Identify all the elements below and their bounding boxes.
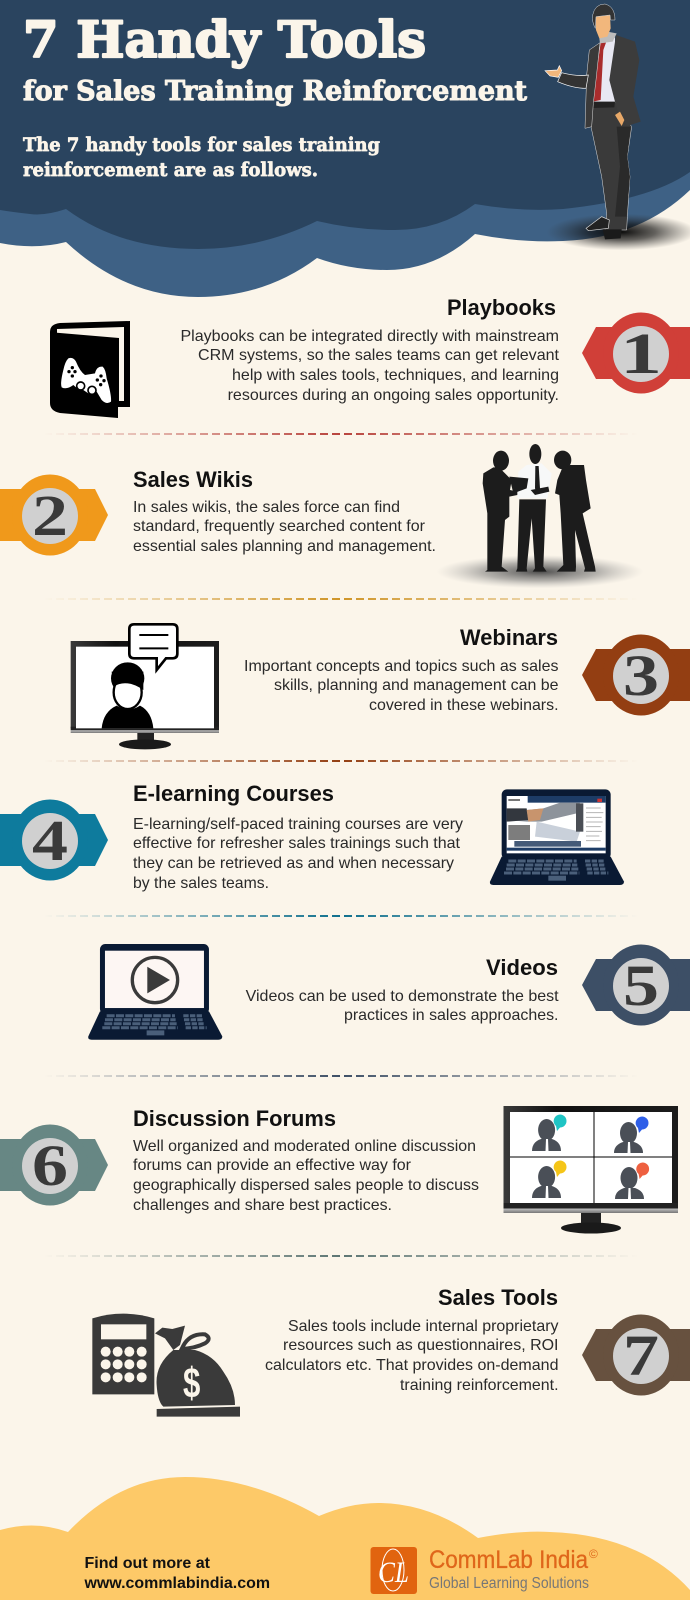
text block: standard, frequently searched content for: [133, 518, 426, 535]
text block: covered in these webinars.: [369, 697, 558, 714]
logo: CommLab India: [370, 1546, 598, 1594]
text block: practices in sales approaches.: [344, 1007, 558, 1024]
person 4 with red bubble: [615, 1162, 649, 1199]
panel: footer: [0, 1477, 690, 1600]
intro text: The 7 handy tools for sales training: [23, 134, 380, 156]
panel: 5 Videos: [88, 944, 690, 1040]
icon: webinar monitor: [71, 624, 219, 749]
text block: forums can provide an effective way for: [133, 1157, 412, 1174]
text block: resources during an ongoing sales opportunity.: [228, 387, 559, 404]
badge: number 1: [582, 312, 690, 394]
panel: 4 E-learning Courses: [0, 781, 624, 892]
text block: they can be retrieved as and when necessary: [133, 855, 454, 872]
subtitle: for Sales Training Reinforcement: [23, 76, 528, 107]
heading: Sales Tools: [438, 1285, 558, 1310]
text block: [265, 1318, 558, 1394]
footer wave: [0, 1477, 690, 1600]
badge: number 4: 4: [32, 808, 68, 873]
logo: CommLab India: ©: [589, 1547, 598, 1561]
panel: header: [0, 0, 690, 297]
heading: Sales Wikis: [133, 467, 253, 492]
text block: [246, 988, 559, 1024]
text block: [133, 1138, 479, 1214]
badge: number 1: 1: [620, 321, 662, 386]
text block: help with sales tools, techniques, and learning: [232, 367, 559, 384]
icon: laptop with play button: [88, 944, 222, 1040]
panel: 1 Playbooks: [50, 295, 690, 418]
text block: Playbooks can be integrated directly with mainstream: [180, 328, 559, 345]
icon: game playbook: [50, 321, 130, 418]
badge: number 4: [0, 800, 108, 880]
text block: geographically dispersed sales people to discuss: [133, 1177, 479, 1194]
badge: number 5: 5: [623, 953, 659, 1018]
logo: CommLab India: CommLab India: [429, 1546, 588, 1574]
badge: number 6: 6: [32, 1133, 68, 1198]
person 1 with teal bubble: [532, 1114, 566, 1151]
title: 7 Handy Tools: [23, 10, 426, 69]
heading: Discussion Forums: [133, 1106, 336, 1131]
person 3 with yellow bubble: [532, 1160, 566, 1198]
text block: Sales tools include internal proprietary: [288, 1318, 558, 1335]
intro text: [23, 134, 380, 181]
panel: 2 Sales Wikis: [0, 444, 643, 588]
text block: essential sales planning and management.: [133, 538, 436, 555]
badge: number 3: 3: [623, 643, 659, 708]
person 2 with blue bubble: [614, 1116, 648, 1153]
text block: Important concepts and topics such as sales: [244, 658, 558, 675]
logo: CommLab India: Global Learning Solutions: [429, 1575, 589, 1592]
heading: E-learning Courses: [133, 781, 334, 806]
icon: laptop with course: [490, 789, 624, 885]
illustration: businessman presenting: [545, 4, 690, 250]
icon: calculator and money bag: [92, 1314, 240, 1417]
call to action: [84, 1555, 270, 1592]
call to action: www.commlabindia.com: [84, 1575, 270, 1592]
logo: CommLab India: CL: [378, 1556, 409, 1589]
icon: calculator and money bag: $: [183, 1359, 200, 1406]
text block: challenges and share best practices.: [133, 1197, 392, 1214]
header light wave: [0, 0, 690, 297]
badge: number 2: [0, 474, 108, 556]
icon: three businessmen: [437, 444, 643, 588]
intro text: reinforcement are as follows.: [23, 159, 318, 181]
badge: number 7: 7: [623, 1323, 659, 1388]
header dark wave: [0, 0, 690, 249]
text block: CRM systems, so the sales teams can get relevant: [198, 347, 560, 364]
text block: [180, 328, 560, 404]
panel: 3 Webinars: [71, 624, 690, 749]
text block: [244, 658, 559, 714]
badge: number 2: 2: [32, 483, 68, 548]
text block: [133, 499, 436, 555]
panel: 6 Discussion Forums: [0, 1106, 678, 1234]
panel: 7 Sales Tools: [92, 1285, 690, 1417]
call to action: Find out more at: [84, 1555, 211, 1572]
text block: Videos can be used to demonstrate the best: [246, 988, 559, 1005]
text block: effective for refresher sales trainings such that: [133, 835, 461, 852]
text block: resources such as questionnaires, ROI: [283, 1337, 558, 1354]
badge: number 6: [0, 1124, 108, 1206]
badge: number 5: [582, 944, 690, 1026]
heading: Videos: [486, 955, 558, 980]
text block: training reinforcement.: [400, 1377, 558, 1394]
text block: by the sales teams.: [133, 875, 269, 892]
badge: number 3: [582, 634, 690, 716]
heading: Playbooks: [447, 295, 556, 320]
icon: forum monitor: [504, 1106, 678, 1234]
text block: In sales wikis, the sales force can find: [133, 499, 400, 516]
badge: number 7: [582, 1314, 690, 1396]
text block: calculators etc. That provides on-demand: [265, 1357, 558, 1374]
text block: Well organized and moderated online discussion: [133, 1138, 476, 1155]
text block: E-learning/self-paced training courses are very: [133, 816, 463, 833]
text block: skills, planning and management can be: [274, 677, 559, 694]
game controller: [61, 358, 111, 403]
text block: [133, 816, 463, 892]
heading: Webinars: [460, 625, 558, 650]
